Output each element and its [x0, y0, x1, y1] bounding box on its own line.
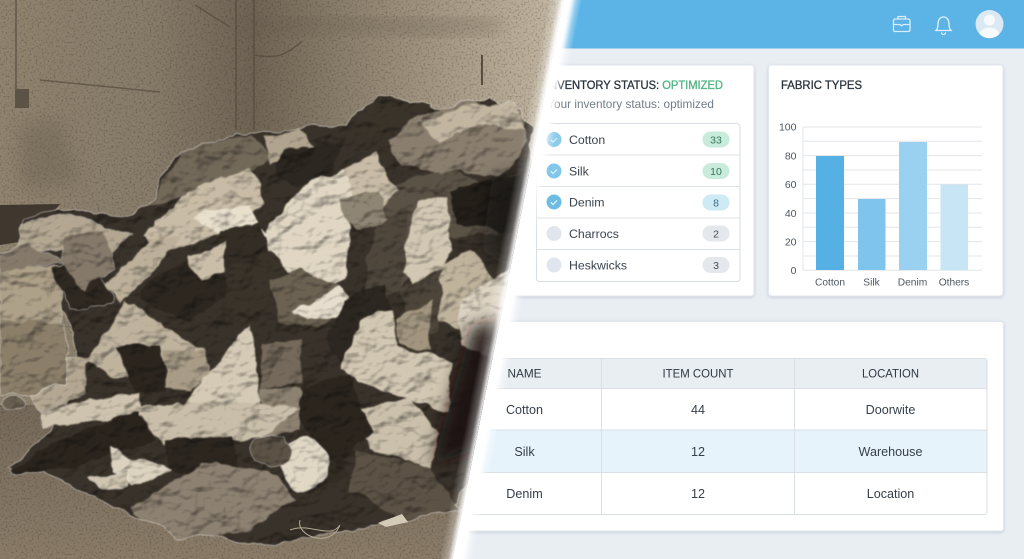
bar chart	[779, 122, 982, 288]
paper and threads on floor	[290, 514, 408, 538]
list row: Silk: Silk	[569, 164, 590, 178]
list row: Cotton	[546, 132, 730, 148]
table row: Silk: 12	[691, 445, 705, 459]
soft white feather on photo edge	[438, 0, 564, 559]
list row: Heskwicks: 3	[713, 260, 719, 272]
subtitle: Your inventory status: optimized	[547, 97, 714, 111]
bar chart: 80	[785, 150, 797, 162]
white diagonal divider glow	[452, 0, 585, 559]
table row: Denim: Denim	[506, 487, 543, 501]
bar chart: 40	[785, 208, 797, 220]
left wall	[0, 0, 252, 420]
panel: fabric types	[768, 65, 1003, 296]
loose fluff and bag at left	[0, 214, 329, 491]
table header row: NAME	[507, 366, 542, 380]
bar: Others 60	[940, 184, 968, 270]
bar chart: Denim	[898, 278, 927, 288]
clothes pile	[10, 95, 535, 545]
bar chart: Others	[939, 278, 969, 288]
table header row: ITEM COUNT	[662, 366, 734, 380]
table header row: LOCATION	[862, 366, 919, 380]
bar: Silk 50	[858, 199, 886, 270]
list row: Denim: Denim	[569, 196, 605, 210]
table row: Silk: Silk	[514, 445, 535, 459]
list row: Charrocs	[546, 226, 730, 242]
panel: item table	[440, 322, 1004, 531]
icon: user avatar	[976, 10, 1004, 38]
table row: Denim	[506, 487, 914, 501]
list row: Denim	[546, 194, 730, 210]
table row: Cotton: Cotton	[506, 403, 543, 417]
bar chart: 20	[785, 236, 797, 248]
bar: Cotton 80	[816, 156, 844, 270]
panel: inventory status	[505, 65, 754, 296]
film grain on walls and floor	[0, 0, 564, 559]
bar chart: 100	[779, 122, 797, 134]
header bar	[440, 0, 1024, 48]
heading: inventory status: INVENTORY STATUS: OPTIMIZED	[546, 79, 723, 92]
icon: bell	[936, 17, 951, 34]
photo: pile of discarded clothes in a derelict room	[0, 0, 564, 559]
bar: Denim 90	[899, 142, 927, 270]
table row: Cotton: 44	[691, 403, 705, 417]
floor	[0, 405, 520, 559]
table row: Denim: 12	[691, 487, 705, 501]
wall stains and details	[0, 0, 500, 245]
list row: Cotton: Cotton	[569, 133, 605, 147]
bar chart: Silk	[863, 278, 881, 288]
right wall	[252, 0, 564, 420]
list row: Charrocs: 2	[713, 228, 719, 240]
list row: Silk	[546, 163, 730, 179]
table row: Silk	[514, 445, 922, 459]
inventory list	[536, 124, 740, 282]
heading: fabric types: FABRIC TYPES	[781, 79, 862, 92]
list row: Charrocs: Charrocs	[569, 227, 619, 241]
table row: Silk: Warehouse	[859, 445, 922, 459]
list row: Heskwicks	[546, 257, 730, 273]
list row: Denim: 8	[713, 198, 719, 210]
list row: Cotton: 33	[710, 134, 722, 146]
table row: Denim: Location	[867, 487, 914, 501]
bar chart: 60	[785, 179, 797, 191]
list row: Heskwicks: Heskwicks	[569, 258, 627, 272]
table	[440, 358, 987, 514]
dark shadow along divider	[432, 170, 540, 465]
bar chart: 0	[791, 265, 797, 277]
bar chart: Cotton	[815, 278, 845, 288]
table row: Cotton	[506, 403, 915, 417]
list row: Silk: 10	[710, 166, 722, 178]
table header row	[507, 366, 919, 380]
icon: briefcase	[894, 16, 910, 32]
table row: Cotton: Doorwite	[866, 403, 915, 417]
